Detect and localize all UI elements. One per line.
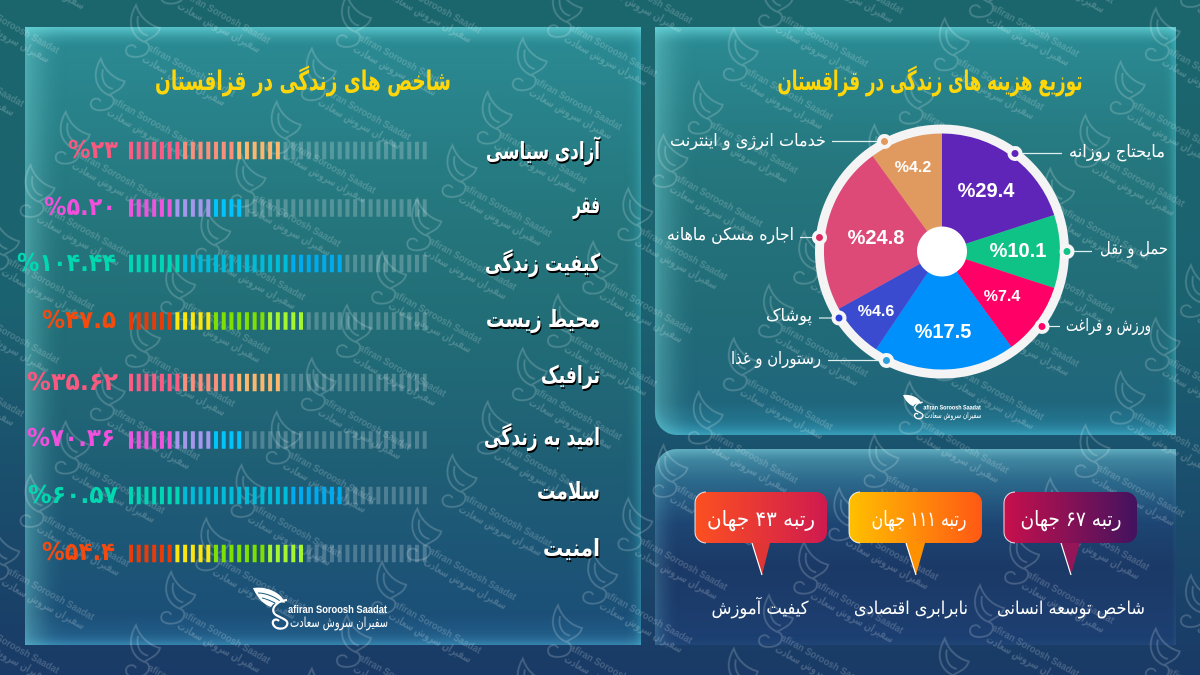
row: security: [42, 534, 600, 566]
pie ring: [820, 129, 1064, 374]
panel: world rankings: [655, 449, 1176, 645]
callout: economic inequality rank: [849, 492, 982, 619]
label: transport: حمل و نقل: [1100, 239, 1168, 259]
callout: human development rank: رتبه ۶۷ جهان: [1020, 507, 1122, 531]
label: restaurants and food: [731, 349, 894, 369]
row: political freedom: [68, 135, 601, 165]
slice values: %4.2: [895, 159, 931, 176]
row: quality of life: %۱۰۴.۴۴: [17, 248, 116, 277]
row: quality of life: کیفیت زندگی: [485, 249, 600, 277]
logo: left panel: سفیران سروش سعادت: [290, 615, 388, 631]
row: political freedom: آزادی سیاسی: [486, 136, 601, 165]
slice: transport: [942, 215, 1060, 288]
label: daily necessities: [1008, 142, 1165, 162]
row: security: %۵۴.۴: [42, 537, 115, 566]
row: security: امنیت: [543, 534, 600, 562]
logo: left panel: afiran Soroosh Saadat: [288, 604, 387, 616]
row: environment: [42, 305, 600, 334]
callout: human development rank: [997, 492, 1145, 619]
row: life expectancy: %۷۰.۳۶: [27, 423, 115, 452]
panel: life indices: [25, 27, 641, 645]
slice values: %24.8: [848, 227, 904, 249]
row: environment: محیط زیست: [486, 305, 600, 333]
row: traffic: ترافیک: [541, 361, 600, 389]
row: traffic: [27, 361, 600, 396]
slice: daily necessities: [942, 134, 1054, 252]
label: rent: اجاره مسکن ماهانه: [667, 225, 794, 245]
slice values: %7.4: [984, 288, 1020, 305]
row: life expectancy: [27, 423, 600, 452]
label: clothing: پوشاک: [766, 306, 812, 326]
row: poverty: فقر: [572, 191, 600, 219]
row: life expectancy: امید به زندگی: [484, 423, 600, 451]
indicators chart: [17, 135, 601, 566]
slice: sport and leisure: [942, 252, 1054, 347]
logo: cost panel: سفیران سروش سعادت: [924, 410, 981, 420]
label: sport and leisure: [1034, 316, 1151, 336]
callout: education quality rank: رتبه ۴۳ جهان: [707, 507, 815, 531]
slice values: [848, 159, 1046, 343]
row: quality of life: [17, 248, 600, 277]
row: poverty: [44, 191, 600, 221]
logo: left panel: [253, 588, 388, 631]
row: health: سلامت: [537, 477, 600, 505]
row: health: [28, 477, 600, 509]
label: restaurants and food: رستوران و غذا: [731, 349, 821, 369]
label: energy and internet: خدمات انرژی و اینترنت: [670, 131, 826, 151]
callout: education quality rank: [695, 492, 827, 619]
panel: cost distribution: [655, 27, 1176, 435]
slice: energy and internet: [873, 133, 942, 252]
slice: clothing: [839, 252, 942, 349]
label: sport and leisure: ورزش و فراغت: [1066, 316, 1151, 336]
label: daily necessities: مایحتاج روزانه: [1069, 142, 1165, 162]
row: traffic: %۳۵.۶۲: [27, 367, 118, 396]
slice values: %4.6: [858, 303, 894, 320]
logo: cost panel: [903, 395, 982, 420]
slice: rent: [824, 156, 942, 309]
slice: restaurants and food: [876, 252, 1011, 370]
logo: cost panel: afiran Soroosh Saadat: [923, 405, 982, 412]
callout: economic inequality rank: رتبه ۱۱۱ جهان: [872, 507, 966, 531]
callout: economic inequality rank: نابرابری اقتصادی: [854, 598, 968, 619]
pie centre hole: [917, 226, 967, 276]
callout: human development rank: شاخص توسعه انسانی: [997, 598, 1145, 619]
label: clothing: [766, 306, 846, 326]
row: poverty: %۵.۲۰: [44, 192, 116, 221]
heading: life indices: شاخص های زندگی در قزاقستان: [155, 65, 451, 97]
pie chart: [820, 129, 1064, 374]
slice values: %29.4: [958, 180, 1015, 202]
row: health: %۶۰.۵۷: [28, 480, 118, 509]
row: environment: %۴۷.۵: [42, 305, 116, 334]
pie leaders and labels: [667, 131, 1168, 369]
slice values: %17.5: [915, 321, 971, 343]
label: transport: [1060, 239, 1168, 259]
slice values: %10.1: [990, 240, 1046, 262]
callout: education quality rank: کیفیت آموزش: [712, 596, 809, 619]
row: political freedom: %۲۳: [68, 135, 118, 164]
